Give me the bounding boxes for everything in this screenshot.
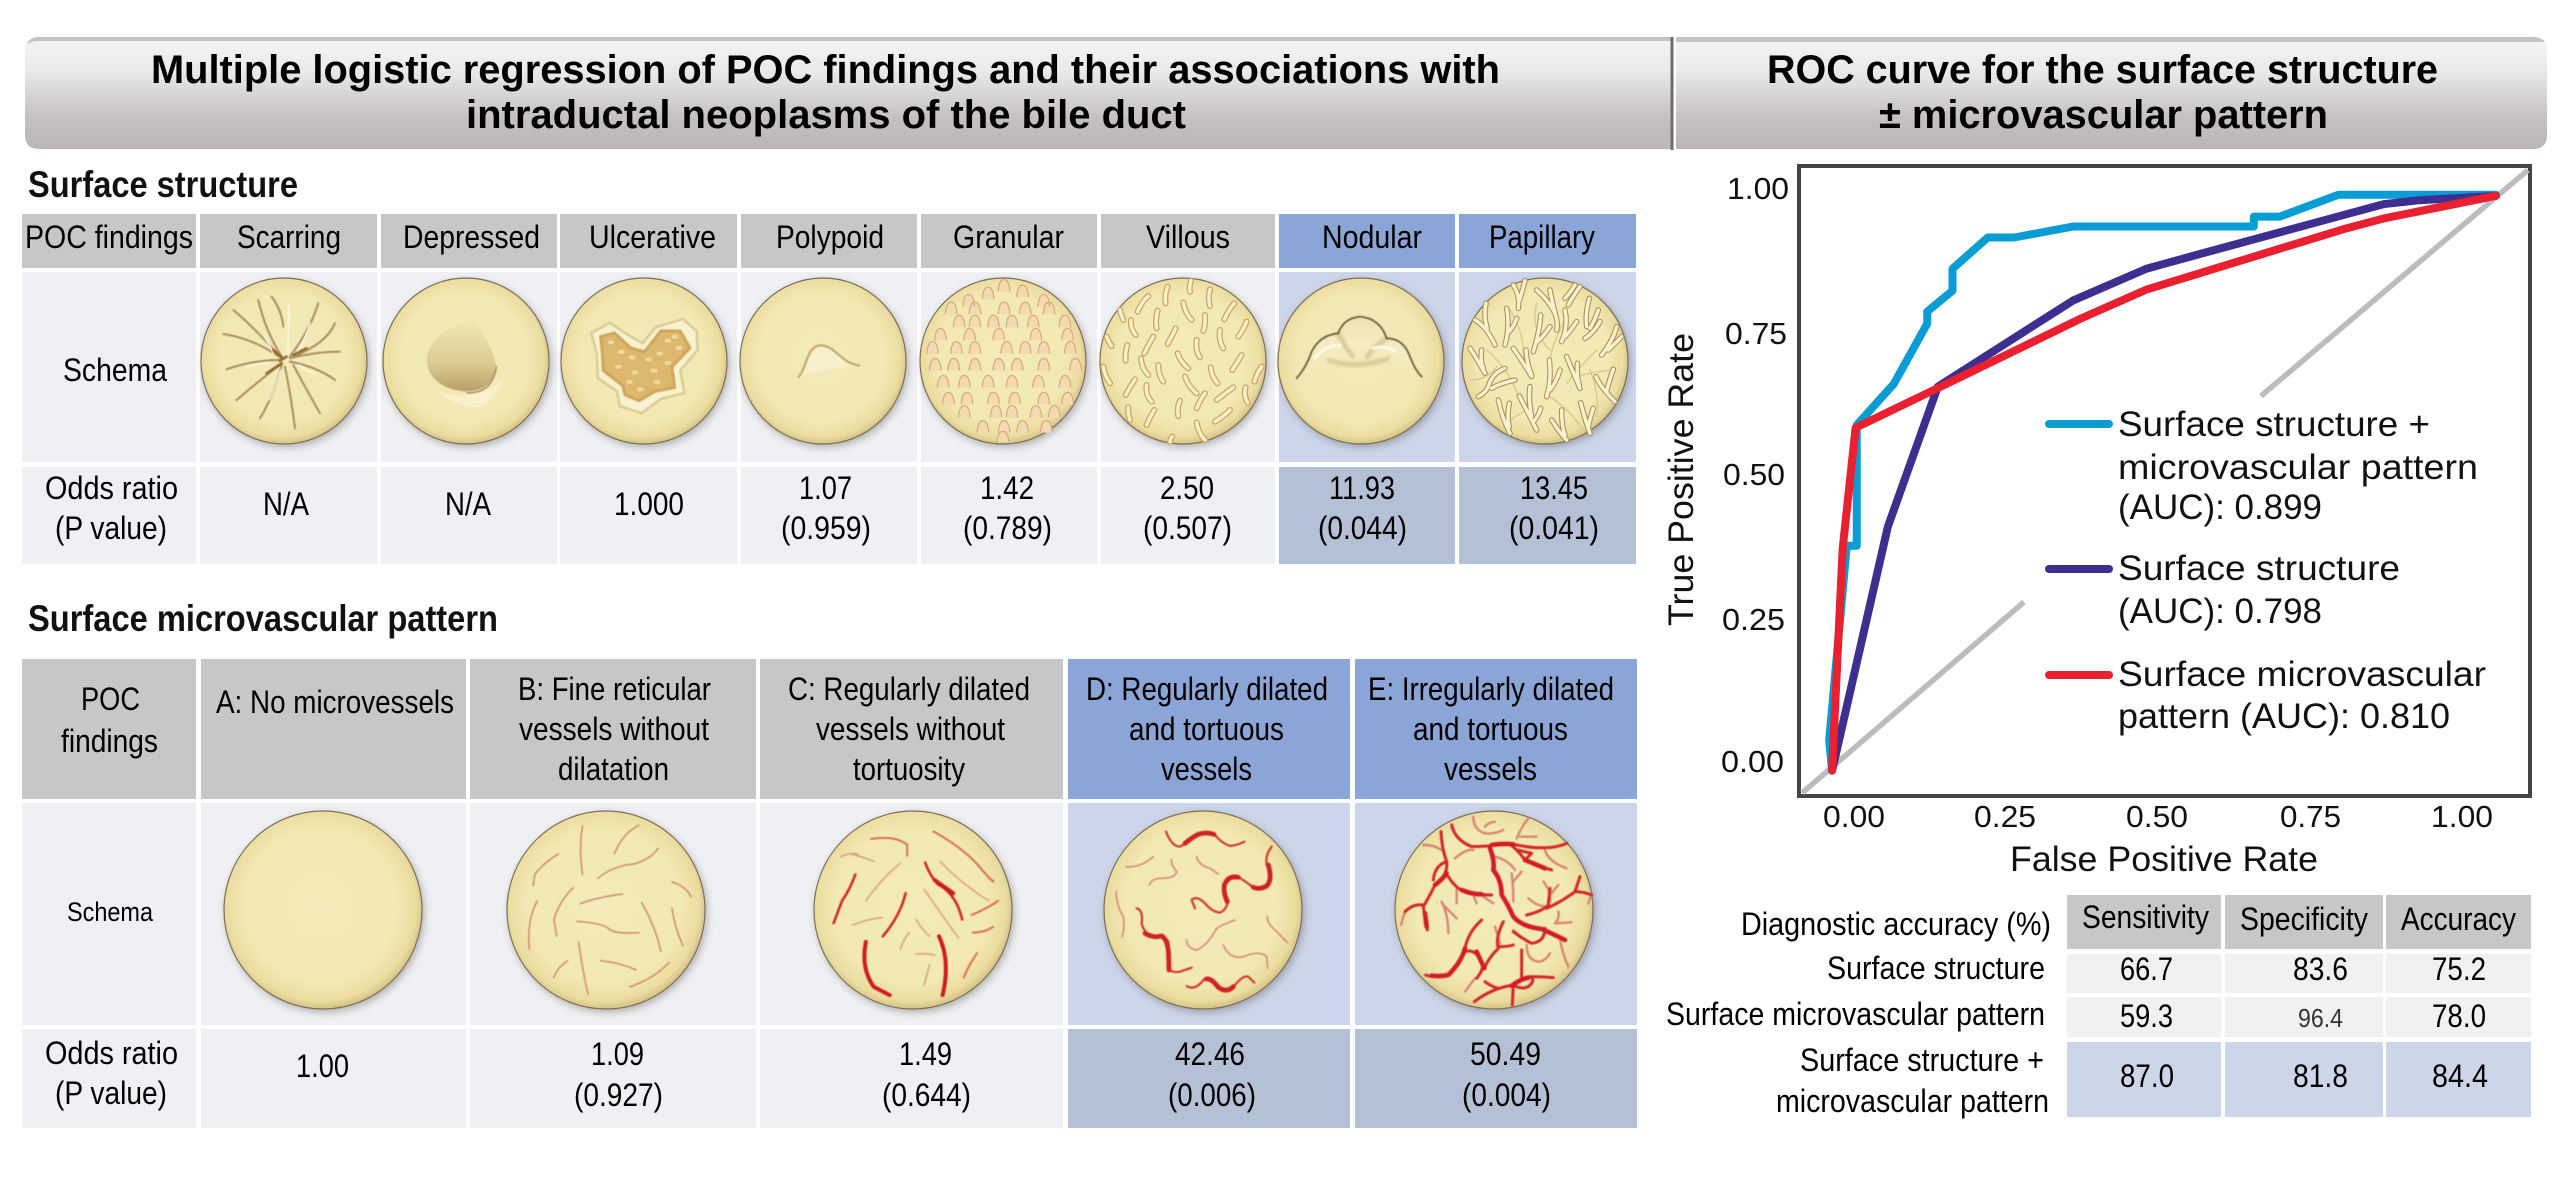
odds ratio row: 1.07 [799,470,852,506]
icon: no microvessels schema [224,811,424,1012]
y axis tick labels: 0.25 [1722,602,1785,637]
row: combined: microvascular pattern [1776,1083,2049,1119]
table header row: vessels without [519,711,709,747]
icon: depressed schema [383,278,551,447]
odds ratio row [22,1029,1637,1128]
icon: polypoid schema [740,278,908,447]
column headers: Accuracy [2401,901,2517,937]
y axis tick labels: 0.50 [1723,457,1785,492]
schema row backgrounds and label: Schema [63,352,168,388]
icon: villous schema [1100,278,1268,447]
legend: combined: microvascular pattern [2118,448,2478,487]
odds ratio row: 13.45 [1520,470,1588,506]
table header row [22,214,1636,268]
odds ratio row: (0.507) [1143,510,1232,546]
legend: combined [2049,405,2478,527]
icon: granular schema [920,278,1088,447]
odds ratio row: (0.006) [1168,1077,1256,1113]
row: combined: Surface structure + [1800,1042,2044,1078]
ROC curves [1829,195,2496,771]
table header row: dilatation [558,751,669,787]
panel: surface microvascular pattern table [22,659,1637,1128]
heading: regression title: Multiple logistic regression of POC findings and their associations with [151,48,1500,92]
odds ratio row: (0.044) [1318,510,1407,546]
schema row backgrounds and label [22,803,1637,1025]
curve: surface microvascular pattern [1832,196,2496,771]
table header row: POC [81,681,140,717]
panel: diagnostic accuracy table [1666,895,2531,1119]
schema row backgrounds and label: Schema [67,897,154,927]
plot frame [1799,166,2530,796]
column headers: Sensitivity [2082,899,2210,935]
heading: regression title [151,48,1500,137]
icon: scarring schema [201,278,369,447]
odds ratio row: 1.00 [296,1048,349,1084]
row: surface microvascular pattern [1666,996,2486,1034]
odds ratio row: (P value) [55,510,167,546]
x axis title: False Positive Rate [2010,840,2318,879]
heading: ROC title: ROC curve for the surface structure [1767,48,2438,92]
icon: regularly dilated and tortuous vessels schema [1104,811,1304,1012]
row: combined: 87.0 [2120,1058,2174,1094]
odds ratio row: N/A [445,486,491,522]
table header row: Nodular [1322,219,1422,255]
icon: irregularly dilated and tortuous vessels schema [1395,811,1595,1012]
row: surface microvascular pattern: Surface microvascular pattern [1666,996,2045,1032]
table header row: Polypoid [776,219,884,255]
column headers: Diagnostic accuracy (%) [1741,906,2051,942]
icon: fine reticular vessels schema [507,811,707,1012]
curve: surface structure + microvascular pattern [1829,195,2496,771]
odds ratio row: (0.004) [1462,1077,1551,1113]
legend: surface structure: (AUC): 0.798 [2118,592,2322,631]
table header row: vessels without [816,711,1005,747]
odds ratio row: Odds ratio [45,470,178,506]
curve: surface structure [1832,196,2496,771]
odds ratio row: (0.644) [882,1077,971,1113]
icon: papillary schema [1462,278,1630,447]
odds ratio row: (0.041) [1509,510,1599,546]
section heading: surface microvascular pattern: Surface microvascular pattern [28,598,498,639]
table header row: tortuosity [853,751,966,787]
odds ratio row: (0.959) [781,510,871,546]
odds ratio row: (P value) [55,1075,167,1111]
row: surface structure: 66.7 [2120,951,2173,987]
legend: surface microvascular pattern: Surface microvascular [2118,655,2486,694]
header bar: left title [25,37,1672,149]
odds ratio row: 1.42 [980,470,1034,506]
table header row: and tortuous [1413,711,1568,747]
table header row: C: Regularly dilated [788,671,1030,707]
legend: surface microvascular pattern: pattern (AUC): 0.810 [2118,697,2450,736]
table header row: POC findings [25,219,193,255]
panel: surface structure table [22,214,1636,564]
column headers [1741,899,2517,942]
table header row: Granular [953,219,1064,255]
odds ratio row: (0.927) [574,1077,663,1113]
icon: nodular schema [1278,278,1446,447]
legend: combined: Surface structure + [2118,405,2430,444]
y axis tick labels: 1.00 [1727,171,1789,206]
row: combined: 84.4 [2432,1058,2488,1094]
row: surface microvascular pattern: 78.0 [2432,998,2486,1034]
x axis tick labels: 0.75 [2280,799,2341,834]
table header row: E: Irregularly dilated [1368,671,1614,707]
heading: regression title: intraductal neoplasms of the bile duct [466,93,1186,137]
y axis tick labels: 0.00 [1721,744,1784,779]
row: combined: 81.8 [2293,1058,2348,1094]
reference diagonal [1802,170,2528,793]
row: surface structure: 75.2 [2432,951,2486,987]
row: surface structure [1827,950,2486,987]
x axis tick labels: 1.00 [2431,799,2493,834]
odds ratio row: 11.93 [1329,470,1395,506]
table header row: Villous [1146,219,1230,255]
row: surface microvascular pattern: 96.4 [2298,1003,2343,1033]
legend: surface microvascular pattern [2049,655,2486,736]
table header row: B: Fine reticular [518,671,711,707]
table header row: Papillary [1489,219,1596,255]
y axis title: True Positive Rate [1662,333,1701,626]
x axis tick labels: 0.50 [2126,799,2188,834]
section heading: surface structure: Surface structure [28,164,298,205]
table header row: findings [61,723,158,759]
odds ratio row: 1.49 [899,1036,952,1072]
table header row: vessels [1161,751,1252,787]
table cell backgrounds [2067,895,2531,1117]
x axis tick labels [1823,799,2493,834]
x axis tick labels: 0.00 [1823,799,1885,834]
odds ratio row [22,467,1636,564]
table header row: A: No microvessels [216,684,454,720]
odds ratio row: 42.46 [1175,1036,1245,1072]
odds ratio row: (0.789) [963,510,1052,546]
row: combined [1776,1042,2488,1119]
table header row: and tortuous [1129,711,1284,747]
legend: surface structure: Surface structure [2118,549,2400,588]
schema row backgrounds and label [22,272,1636,462]
odds ratio row: 1.000 [614,486,684,522]
table header row: Scarring [237,219,341,255]
legend [2049,405,2486,736]
y axis tick labels: 0.75 [1725,316,1787,351]
row: surface microvascular pattern: 59.3 [2120,998,2173,1034]
x axis tick labels: 0.25 [1974,799,2036,834]
heading: ROC title: ± microvascular pattern [1879,93,2328,137]
row: surface structure: 83.6 [2293,951,2348,987]
odds ratio row: 50.49 [1470,1036,1541,1072]
odds ratio row: 2.50 [1160,470,1214,506]
table header row: Depressed [403,219,540,255]
legend: surface structure [2049,549,2400,631]
odds ratio row: 1.09 [591,1036,644,1072]
row: surface structure: Surface structure [1827,950,2045,986]
odds ratio row: Odds ratio [45,1035,178,1071]
table header row: vessels [1444,751,1537,787]
heading: ROC title [1767,48,2438,137]
icon: ulcerative schema [561,278,729,447]
table header row [22,659,1637,799]
y axis tick labels [1721,171,1789,779]
table header row: D: Regularly dilated [1086,671,1328,707]
icon: regularly dilated vessels schema [814,811,1014,1012]
legend: combined: (AUC): 0.899 [2118,488,2322,527]
header bar: right title [1670,37,2547,150]
column headers: Specificity [2240,901,2369,937]
odds ratio row: N/A [263,486,309,522]
panel: ROC chart [1662,166,2530,879]
table header row: Ulcerative [589,219,716,255]
